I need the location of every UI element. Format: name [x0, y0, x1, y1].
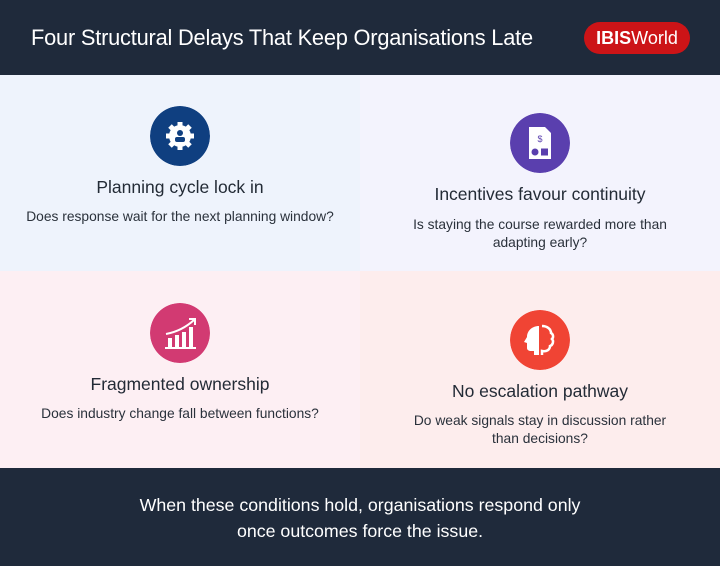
heading: Fragmented ownership [90, 374, 269, 394]
heading: Incentives favour continuity [434, 184, 646, 204]
icon: document [510, 113, 570, 173]
footer text [0, 468, 720, 566]
question: Is staying the course rewarded more than adapting early? [413, 217, 667, 250]
logo: IBISWorld [596, 28, 678, 48]
panel: fragmented ownership [0, 271, 360, 468]
icon: chart [150, 303, 210, 363]
heading: Planning cycle lock in [96, 177, 264, 197]
panel: escalation [360, 271, 720, 468]
icon: gear person [150, 106, 210, 166]
header [0, 0, 720, 75]
panel: incentives [360, 75, 720, 271]
footer text: once outcomes force the issue. [237, 521, 483, 541]
question: Does response wait for the next planning window? [26, 209, 334, 224]
heading: No escalation pathway [452, 381, 628, 401]
panel: planning cycle [0, 75, 360, 271]
logo [584, 22, 690, 54]
title: Four Structural Delays That Keep Organisations Late [31, 25, 533, 50]
question: Does industry change fall between functions? [41, 406, 319, 421]
footer text: When these conditions hold, organisations respond only [140, 495, 580, 515]
question: Do weak signals stay in discussion rather than decisions? [414, 413, 666, 446]
icon: head brain [510, 310, 570, 370]
icon: document: $ [537, 134, 543, 144]
